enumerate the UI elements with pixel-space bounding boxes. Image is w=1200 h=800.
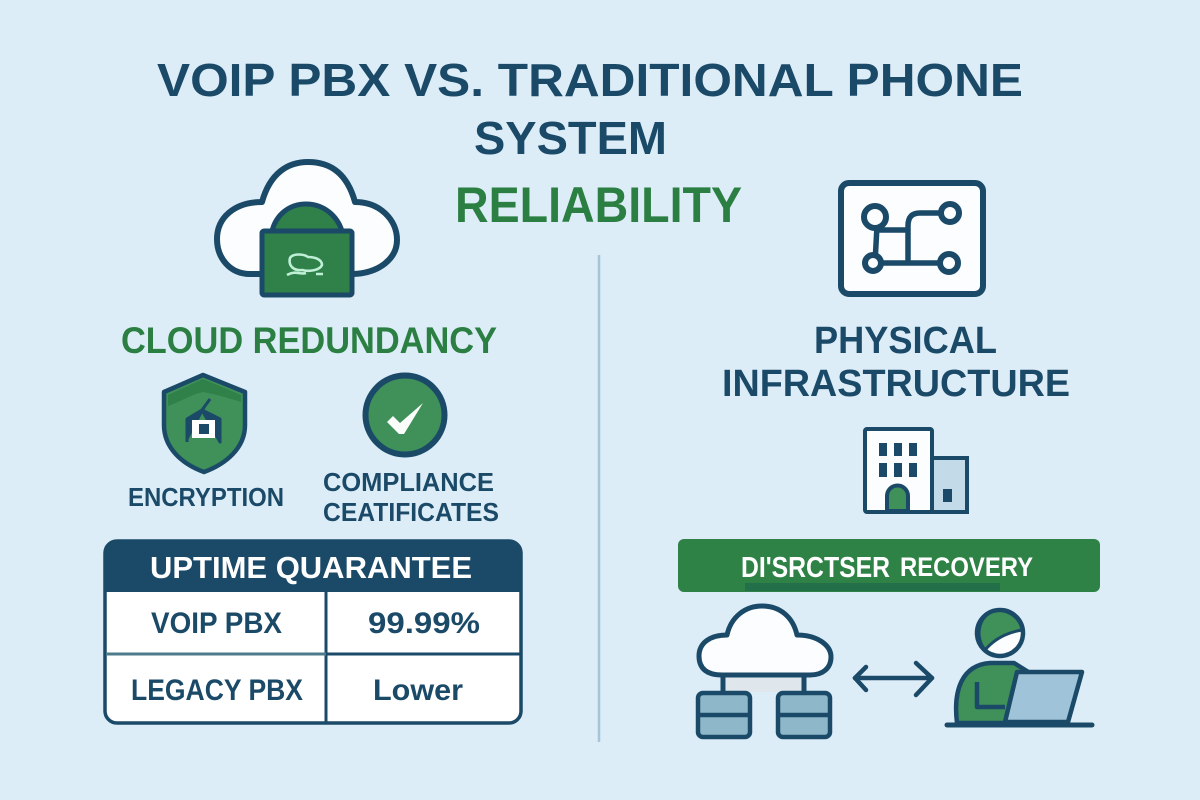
table row: legacy pbx: Lower xyxy=(373,674,463,707)
table row: voip pbx: VOIP PBX xyxy=(151,607,282,640)
heading: physical infrastructure: INFRASTRUCTURE xyxy=(722,363,1070,405)
icon: office building xyxy=(865,429,967,512)
table row: legacy pbx: LEGACY PBX xyxy=(131,674,303,707)
icon: cloud with servers xyxy=(698,606,831,737)
icon: network circuit board xyxy=(841,183,983,294)
title: SYSTEM xyxy=(474,112,667,164)
heading: physical infrastructure: PHYSICAL xyxy=(814,320,997,362)
title xyxy=(157,54,1023,164)
table row: voip pbx xyxy=(151,607,480,640)
icon: compliance check badge xyxy=(366,376,444,454)
heading: cloud redundancy: CLOUD REDUNDANCY xyxy=(121,320,497,361)
subtitle: reliability: RELIABILITY xyxy=(455,177,742,233)
banner: disaster recovery: DI'SRCTSER xyxy=(741,552,890,584)
label: compliance certificates xyxy=(323,467,499,527)
table row: voip pbx: 99.99% xyxy=(368,607,480,640)
icon: encryption shield xyxy=(164,375,245,472)
center divider xyxy=(598,255,600,742)
title: VOIP PBX VS. TRADITIONAL PHONE xyxy=(157,54,1023,106)
table header text: UPTIME QUARANTEE xyxy=(150,550,472,585)
label: compliance certificates: COMPLIANCE xyxy=(323,467,494,497)
label: encryption: ENCRYPTION xyxy=(128,482,284,512)
label: compliance certificates: CEATIFICATES xyxy=(323,497,499,527)
arrow: two-way sync xyxy=(855,663,932,695)
heading: physical infrastructure xyxy=(722,320,1070,405)
banner: disaster recovery: RECOVERY xyxy=(900,552,1033,582)
icon: cloud with lock xyxy=(217,162,397,295)
banner: disaster recovery xyxy=(678,539,1100,592)
table: uptime guarantee xyxy=(105,541,521,723)
icon: person at laptop xyxy=(947,610,1092,725)
table row: legacy pbx xyxy=(131,674,463,707)
